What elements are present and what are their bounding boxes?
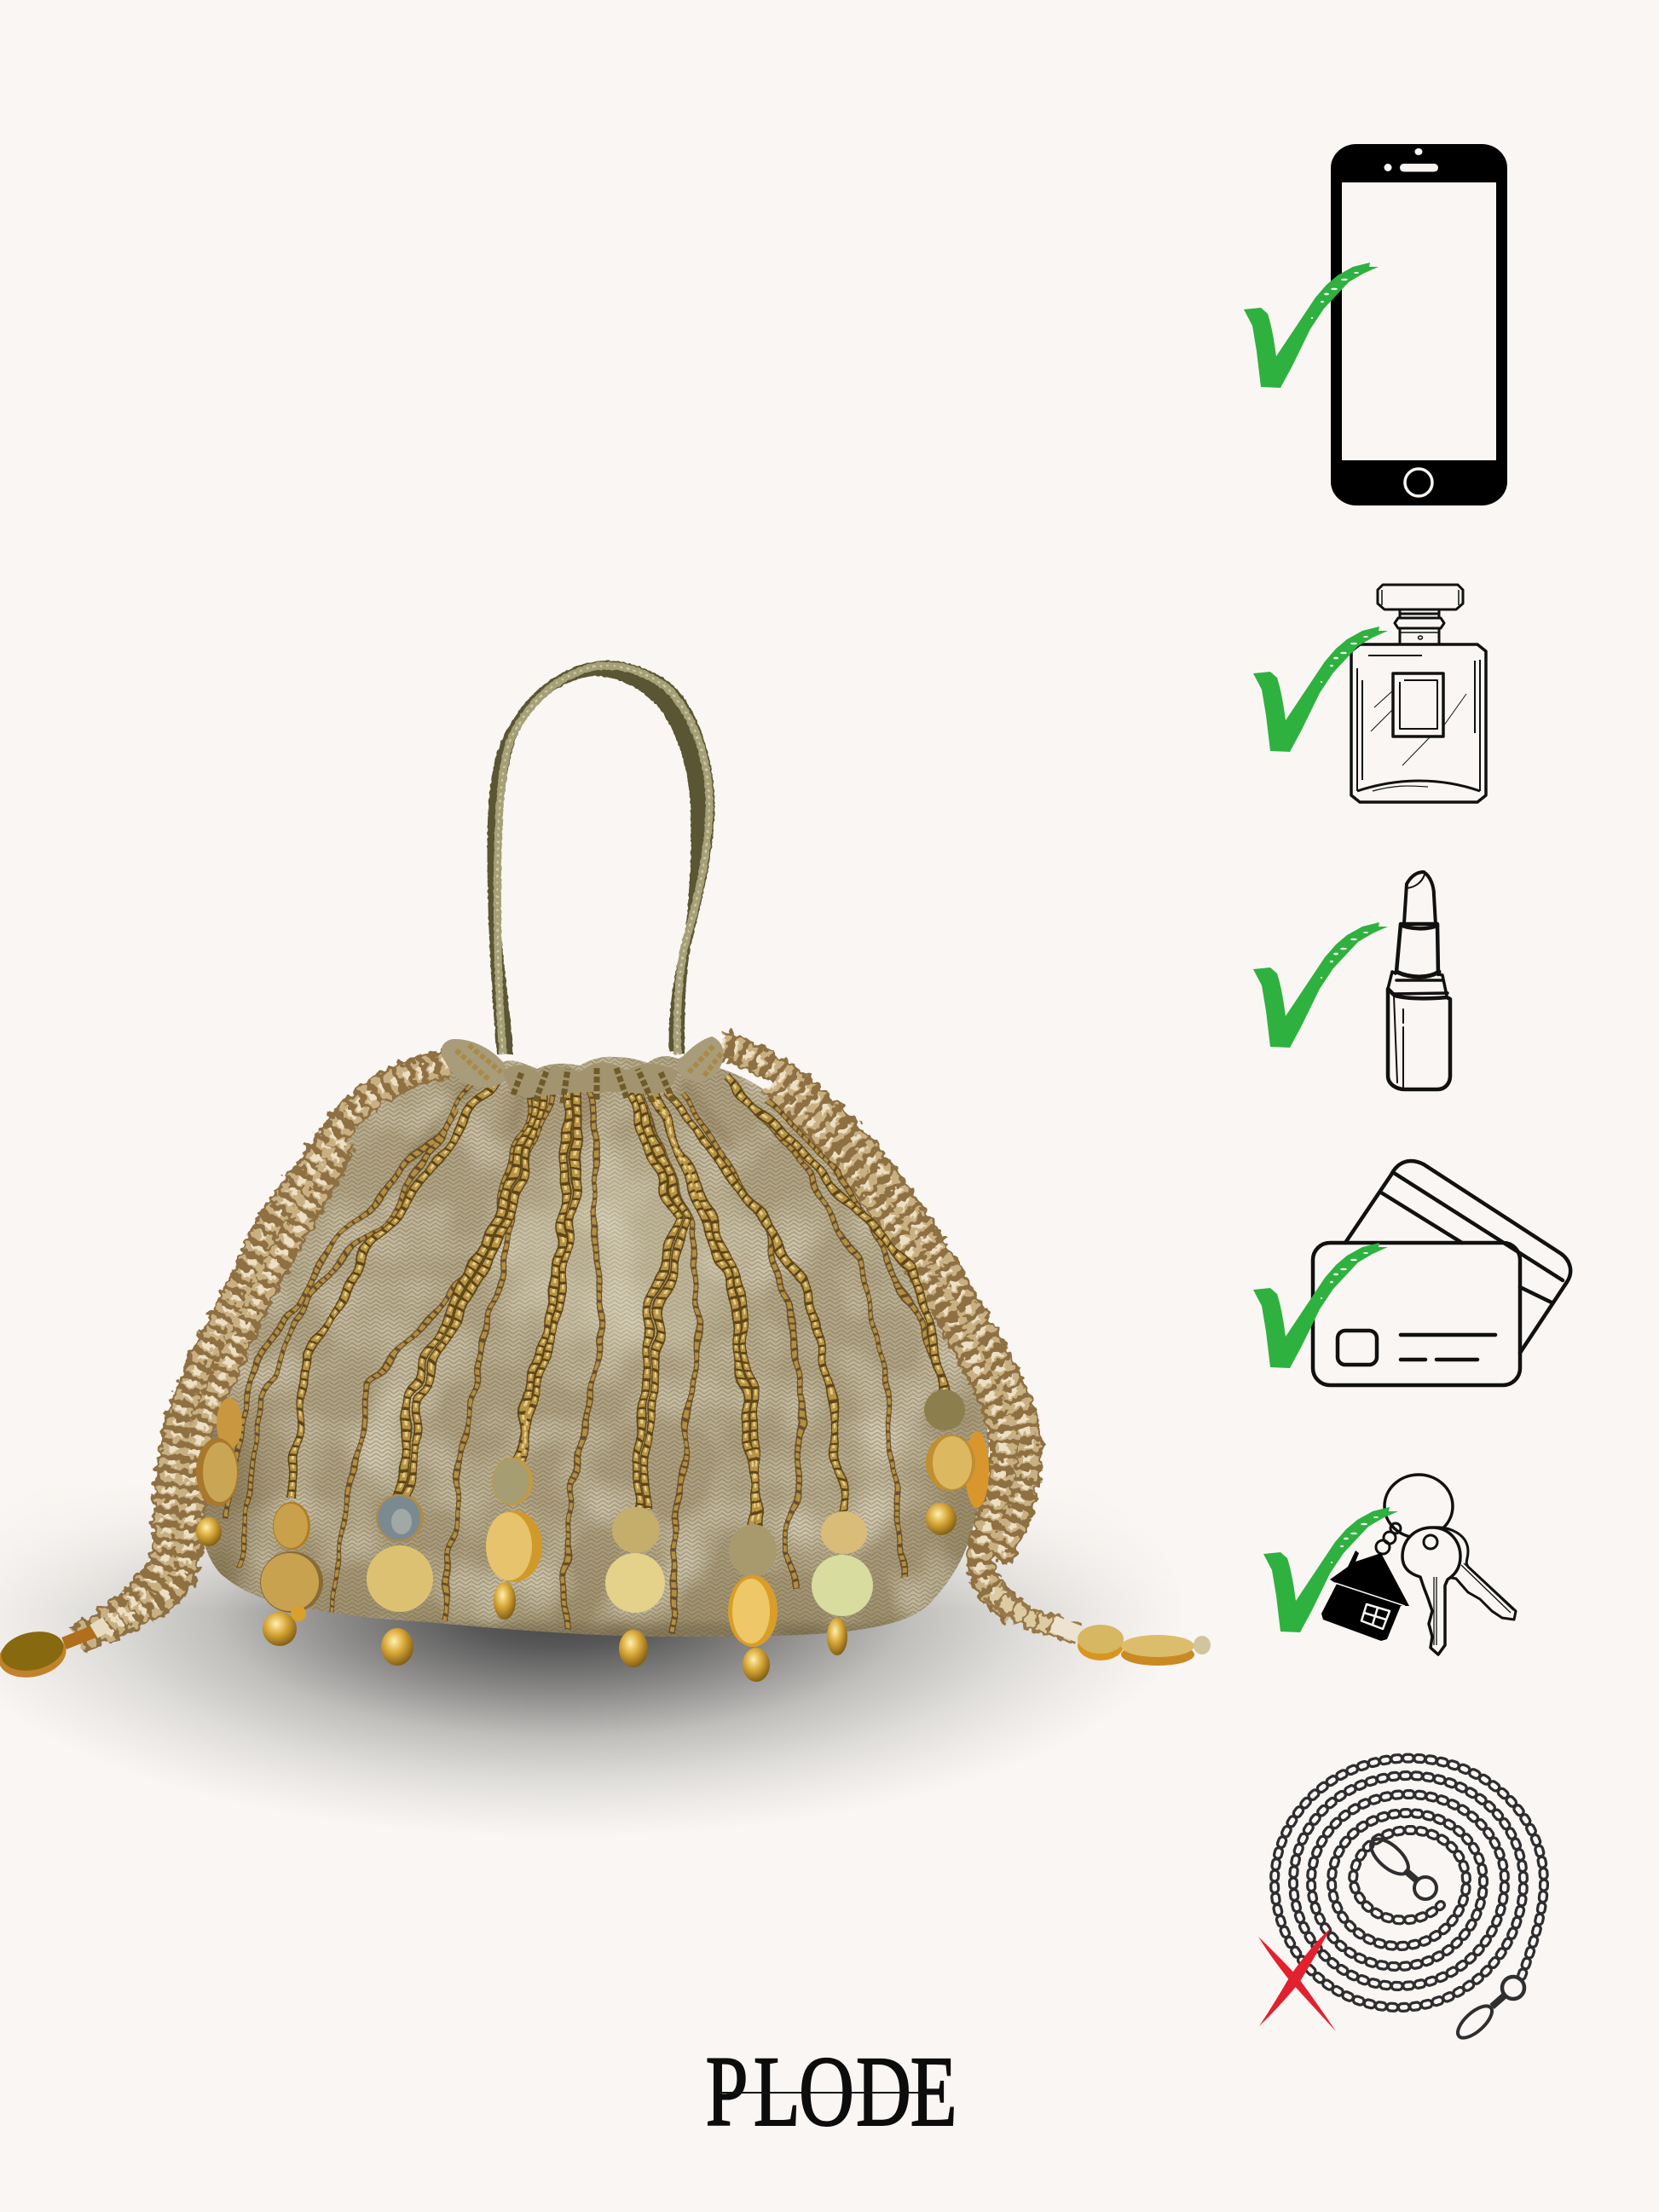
sequin pair D — [486, 1458, 542, 1620]
rear key — [1432, 1528, 1516, 1620]
cross: chain not included — [1258, 1928, 1336, 2031]
outer clasp — [1453, 1977, 1524, 2043]
product photo: gold beaded potli bag — [0, 661, 1211, 1684]
brand logo: PLODE: PLODE — [706, 2036, 957, 2147]
check: phone allowed — [1244, 263, 1379, 388]
bag body fabric — [205, 1037, 989, 1637]
key ring — [1384, 1475, 1453, 1538]
check: perfume allowed — [1253, 627, 1388, 752]
house keychain — [1321, 1551, 1409, 1641]
thin bead strands — [223, 1076, 935, 1632]
check: cards allowed — [1253, 1243, 1388, 1368]
ground shadow under bag — [0, 1527, 1130, 1817]
inner clasp — [1365, 1833, 1436, 1899]
gathered neck ruffles — [441, 1037, 724, 1103]
left side sequins (A) — [196, 1398, 242, 1546]
bag handle — [488, 661, 714, 1054]
icon: coiled metal chain strap — [1275, 1759, 1544, 2043]
sequin pair C — [367, 1494, 433, 1666]
check: keys allowed — [1263, 1507, 1398, 1632]
icon: smartphone — [1331, 144, 1507, 505]
sequin pair B — [260, 1502, 323, 1646]
key chain links — [1376, 1523, 1401, 1554]
left rope tassel with gold sequin — [0, 1624, 107, 1684]
check: lipstick allowed — [1253, 922, 1388, 1048]
gathered creases at neck — [409, 1076, 733, 1159]
sequin pair G — [812, 1511, 873, 1655]
spiral chain — [1275, 1759, 1544, 2007]
right rope tassel with gold sequins — [993, 1592, 1211, 1666]
icon: perfume bottle — [1351, 585, 1486, 802]
icon: lipstick — [1388, 872, 1450, 1089]
front key — [1402, 1528, 1460, 1655]
thick bead strands — [289, 1070, 945, 1526]
sequin pair H — [924, 1389, 989, 1535]
icon: house keys — [1321, 1475, 1516, 1655]
drawstring ropes — [77, 1044, 1028, 1641]
icon: credit cards — [1313, 1161, 1570, 1385]
sequin pair E — [605, 1507, 665, 1667]
sequin pair F — [728, 1524, 777, 1682]
